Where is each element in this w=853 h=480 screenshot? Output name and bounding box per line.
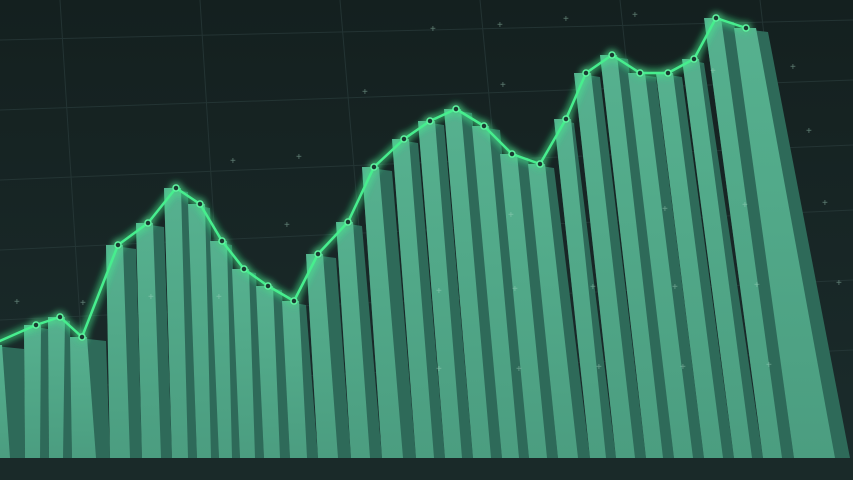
- chart: 3D perspective bar chart with glowing line: +: [822, 198, 828, 209]
- chart: 3D perspective bar chart with glowing line: +: [672, 282, 678, 293]
- chart: 3D perspective bar chart with glowing line: +: [14, 297, 20, 308]
- chart: 3D perspective bar chart with glowing line: +: [766, 360, 772, 371]
- chart: 3D perspective bar chart with glowing line: +: [436, 364, 442, 375]
- chart: 3D perspective bar chart with glowing line: +: [230, 156, 236, 167]
- chart: 3D perspective bar chart with glowing line: +: [516, 364, 522, 375]
- chart: 3D perspective bar chart with glowing line: +: [710, 66, 716, 77]
- chart: 3D perspective bar chart with glowing line: +: [296, 152, 302, 163]
- chart: 3D perspective bar chart with glowing line: +: [512, 284, 518, 295]
- chart: 3D perspective bar chart with glowing line: +: [500, 80, 506, 91]
- chart: 3D perspective bar chart with glowing line: +: [680, 362, 686, 373]
- chart: 3D perspective bar chart with glowing line: +: [806, 126, 812, 137]
- chart: 3D perspective bar chart with glowing line: +: [362, 87, 368, 98]
- chart: 3D perspective bar chart with glowing line: +: [216, 292, 222, 303]
- baseline: [0, 458, 853, 480]
- chart: 3D perspective bar chart with glowing line: +: [790, 62, 796, 73]
- glowing line: [0, 15, 749, 344]
- chart: 3D perspective bar chart with glowing line: +: [430, 24, 436, 35]
- chart: 3D perspective bar chart with glowing line: +: [497, 20, 503, 31]
- chart: 3D perspective bar chart with glowing line: +: [590, 282, 596, 293]
- chart: 3D perspective bar chart with glowing line: +: [632, 10, 638, 21]
- chart: 3D perspective bar chart with glowing line: +: [148, 292, 154, 303]
- chart: 3D perspective bar chart with glowing line: +: [284, 220, 290, 231]
- chart: 3D perspective bar chart with glowing line: +: [836, 278, 842, 289]
- chart: 3D perspective bar chart with glowing line: +: [754, 280, 760, 291]
- chart: 3D perspective bar chart with glowing line: +: [508, 210, 514, 221]
- chart: 3D perspective bar chart with glowing line: +: [742, 200, 748, 211]
- chart: 3D perspective bar chart with glowing line: +: [596, 362, 602, 373]
- chart: 3D perspective bar chart with glowing line: +: [436, 286, 442, 297]
- chart: 3D perspective bar chart with glowing line: +: [80, 298, 86, 309]
- chart: 3D perspective bar chart with glowing line: +: [662, 204, 668, 215]
- chart: 3D perspective bar chart with glowing line: +: [563, 14, 569, 25]
